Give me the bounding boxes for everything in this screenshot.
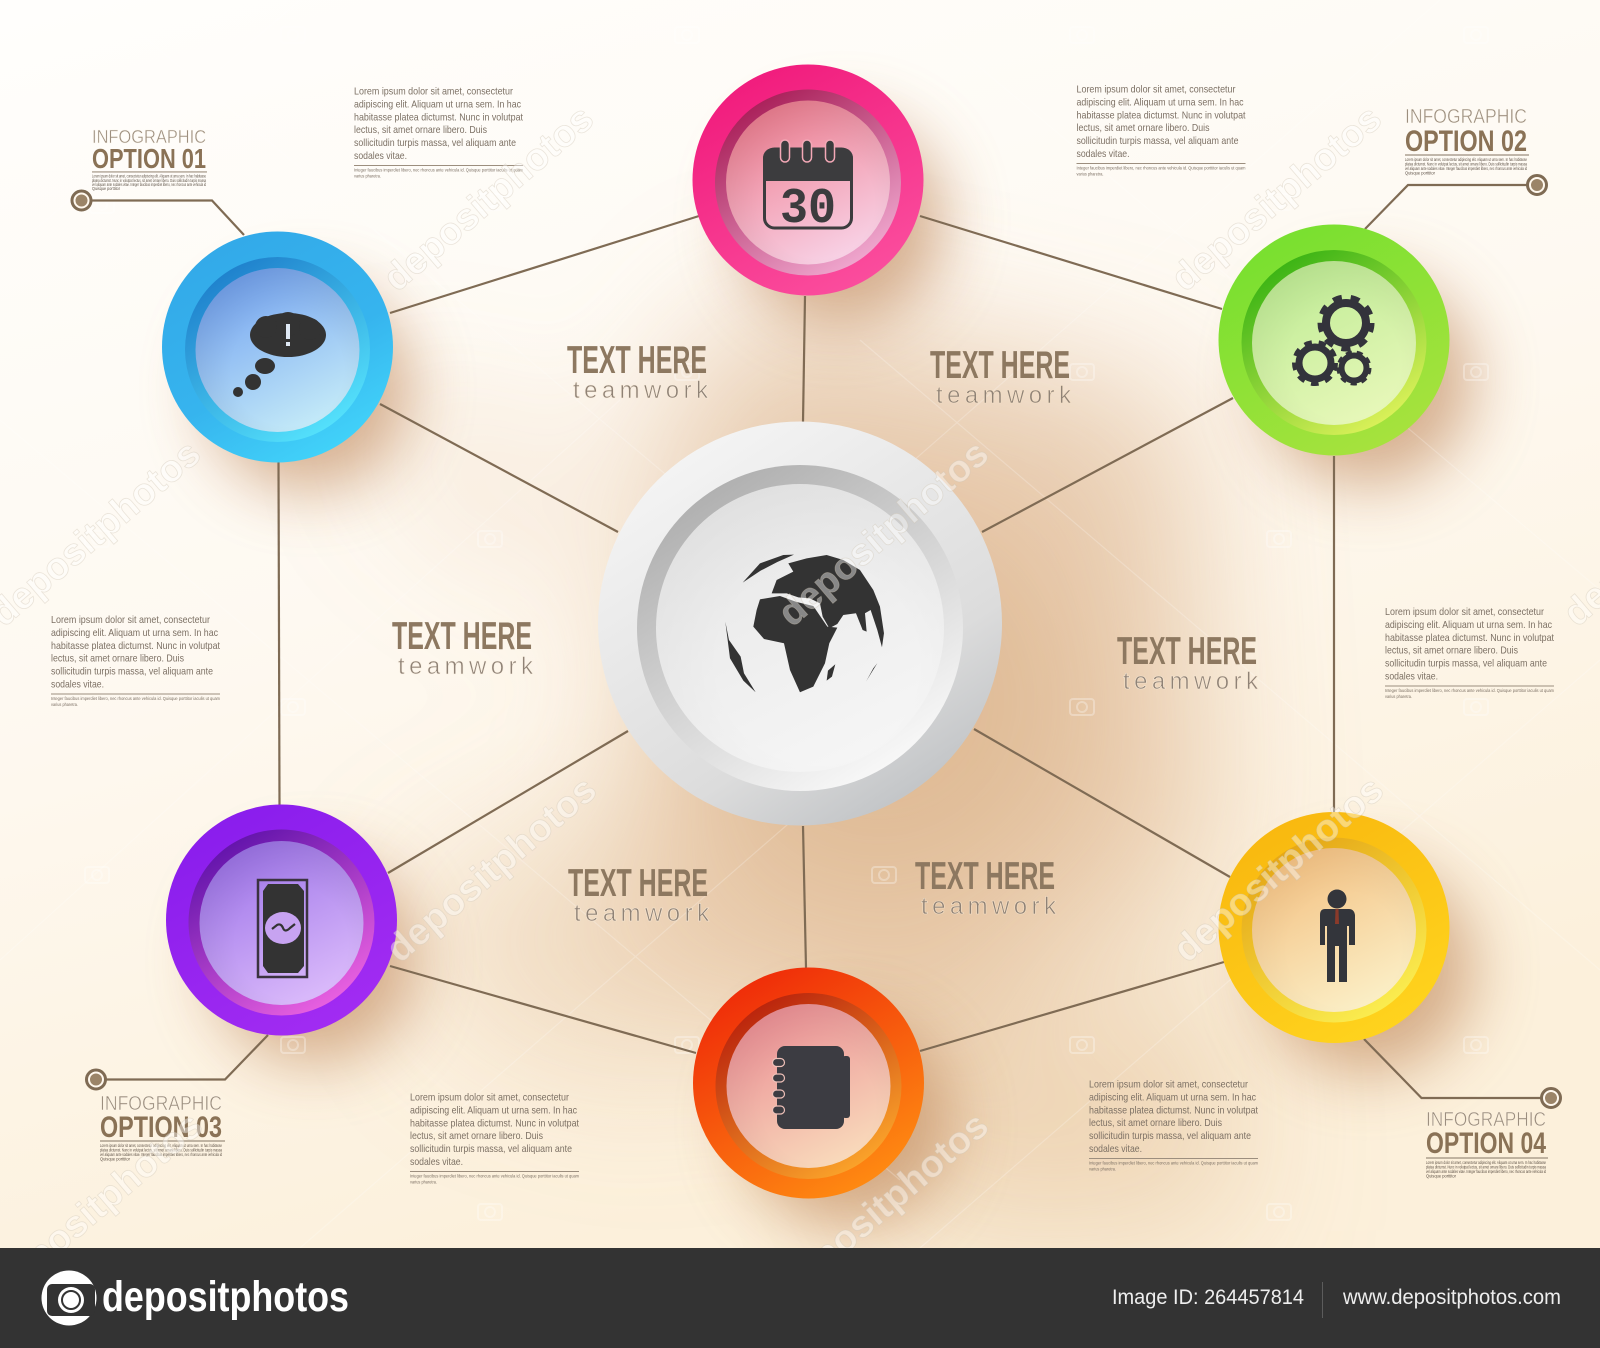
text block: bottom right: habitasse platea dictumst. Nunc in volutpat [1089, 1104, 1258, 1116]
label: text here top right [930, 344, 1072, 409]
text block: middle right: Integer faucibus imperdiet libero, nec rhoncus ante vehicula id. Quisque porttitor iaculis ut quam [1385, 688, 1554, 693]
heading: option 04: INFOGRAPHIC [1426, 1109, 1546, 1131]
text block: middle left: sollicitudin turpis massa, vel aliquam ante [51, 666, 213, 678]
text block: middle right: lectus, sit amet ornare libero. Duis [1385, 645, 1518, 657]
text block: top left: sollicitudin turpis massa, vel aliquam ante [354, 137, 516, 149]
text block: middle left: Integer faucibus imperdiet libero, nec rhoncus ante vehicula id. Quisque porttitor iaculis ut quam [51, 696, 220, 701]
heading: option 02: platea dictumst. Nunc in volutpat lectus, sit amet ornare libero. Duis sollicitudin turpis massa [1405, 162, 1527, 166]
label: text here bottom left: teamwork [574, 900, 710, 927]
watermark text overlay: depositphotos [376, 97, 602, 300]
ring: purple [166, 804, 397, 1036]
heading: option 03: Lorem ipsum dolor sit amet, consectetur adipiscing elit. Aliquam ut urna sem. In hac habitasse [100, 1143, 222, 1148]
heading: option 02: Lorem ipsum dolor sit amet, consectetur adipiscing elit. Aliquam ut urna sem. In hac habitasse [1405, 157, 1527, 162]
text block: top left [354, 86, 523, 178]
heading: option 04 [1426, 1109, 1548, 1178]
text block: bottom left: sodales vitae. [410, 1156, 463, 1168]
text block: middle right: adipiscing elit. Aliquam ut urna sem. In hac [1385, 619, 1552, 631]
text block: top left: habitasse platea dictumst. Nunc in volutpat [354, 111, 523, 123]
text block: top right: sodales vitae. [1076, 148, 1130, 160]
label: text here top right: teamwork [936, 382, 1072, 409]
heading: option 04: OPTION 04 [1426, 1127, 1546, 1160]
text block: bottom left: varius pharetra. [410, 1180, 437, 1184]
text block: middle right: sollicitudin turpis massa, vel aliquam ante [1385, 658, 1547, 670]
site url: www.depositphotos.com [1342, 1285, 1561, 1309]
text block: middle right: habitasse platea dictumst. Nunc in volutpat [1385, 632, 1554, 644]
ring: pink [692, 64, 924, 296]
text block: top right: sollicitudin turpis massa, vel aliquam ante [1076, 135, 1239, 147]
camera watermark icons [85, 27, 1488, 1220]
heading: option 03: INFOGRAPHIC [100, 1093, 222, 1115]
text block: bottom right: Lorem ipsum dolor sit amet, consectetur [1089, 1078, 1248, 1090]
heading: option 01: OPTION 01 [92, 143, 206, 174]
footer bar [0, 1248, 1600, 1348]
callout connector option 01 [72, 191, 244, 235]
text block: top right [1076, 84, 1246, 176]
heading: option 04: Quisque porttitor [1426, 1174, 1456, 1178]
text block: bottom right: Integer faucibus imperdiet libero, nec rhoncus ante vehicula id. Quisque porttitor iaculis ut quam [1089, 1160, 1258, 1166]
heading: option 03: Quisque porttitor [100, 1156, 130, 1162]
text block: middle left: habitasse platea dictumst. Nunc in volutpat [51, 640, 220, 652]
text block: bottom left: sollicitudin turpis massa, vel aliquam ante [410, 1143, 572, 1155]
text block: bottom right: lectus, sit amet ornare libero. Duis [1089, 1117, 1222, 1129]
icon: businessman [1320, 890, 1355, 982]
text block: bottom left [410, 1092, 579, 1184]
heading: option 01: Quisque porttitor [92, 186, 121, 191]
icon: thought bubble [233, 312, 326, 397]
label: text here bottom right: teamwork [921, 893, 1057, 920]
text block: bottom right: adipiscing elit. Aliquam ut urna sem. In hac [1089, 1091, 1256, 1103]
heading: option 02: INFOGRAPHIC [1405, 106, 1527, 128]
label: text here middle left: teamwork [398, 653, 534, 680]
text block: top right: adipiscing elit. Aliquam ut urna sem. In hac [1076, 96, 1244, 108]
text block: bottom right: sodales vitae. [1089, 1143, 1142, 1155]
heading: option 02: vel aliquam ante sodales vitae. Integer faucibus imperdiet libero, nec rhoncus ante vehicula id [1405, 166, 1527, 171]
label: text here middle right: teamwork [1123, 668, 1259, 695]
label: text here top left [567, 339, 709, 404]
heading: option 03 [100, 1093, 225, 1162]
text block: bottom right [1089, 1078, 1258, 1172]
center hub: white ring with globe [598, 422, 1002, 826]
text block: top left: lectus, sit amet ornare libero. Duis [354, 124, 487, 136]
callout connector option 04 [1364, 1039, 1560, 1108]
text block: middle right: Lorem ipsum dolor sit amet, consectetur [1385, 606, 1544, 618]
text block: middle left: Lorem ipsum dolor sit amet, consectetur [51, 614, 210, 626]
text block: top right: habitasse platea dictumst. Nunc in volutpat [1076, 109, 1246, 121]
ring: blue [162, 232, 393, 462]
label: text here middle right [1117, 630, 1259, 695]
label: text here top left: TEXT HERE [567, 339, 707, 382]
label: text here top right: TEXT HERE [930, 344, 1070, 387]
text block: bottom left: Lorem ipsum dolor sit amet, consectetur [410, 1092, 569, 1104]
text block: bottom right: sollicitudin turpis massa, vel aliquam ante [1089, 1130, 1251, 1142]
ring: yellow [1218, 812, 1450, 1043]
label: text here middle right: TEXT HERE [1117, 630, 1257, 673]
text block: middle left [51, 614, 220, 707]
watermark text overlay: depositphotos [1166, 768, 1392, 971]
text block: top right: Lorem ipsum dolor sit amet, consectetur [1076, 84, 1236, 96]
callout connector option 02 [1365, 176, 1546, 229]
icon: calendar: 30 [780, 181, 836, 238]
logo wordmark: depositphotos [102, 1273, 349, 1321]
text block: middle right: varius pharetra. [1385, 694, 1412, 699]
text block: bottom left: lectus, sit amet ornare libero. Duis [410, 1130, 543, 1142]
heading: option 01: Lorem ipsum dolor sit amet, consectetur adipiscing elit. Aliquam ut urna sem. In hac habitasse [92, 174, 207, 179]
heading: option 02: OPTION 02 [1405, 125, 1527, 158]
label: text here bottom right: TEXT HERE [915, 855, 1055, 898]
watermark text overlay: depositphotos [379, 768, 605, 971]
heading: option 01: INFOGRAPHIC [92, 126, 206, 147]
icon: notebook [772, 1046, 850, 1129]
text block: middle left: lectus, sit amet ornare libero. Duis [51, 653, 184, 665]
icon: globe [725, 555, 884, 692]
ring: red [693, 968, 924, 1198]
text block: bottom left: habitasse platea dictumst. Nunc in volutpat [410, 1117, 579, 1129]
label: text here bottom right [915, 855, 1057, 920]
watermark text overlay: depositphotos [1164, 97, 1390, 300]
text block: top right: Integer faucibus imperdiet libero, nec rhoncus ante vehicula id. Quisque porttitor iaculis ut quam [1076, 166, 1246, 170]
text block: middle left: sodales vitae. [51, 678, 104, 690]
label: text here middle left: TEXT HERE [392, 615, 532, 658]
icon: camera logo [42, 1270, 96, 1326]
text block: middle left: adipiscing elit. Aliquam ut urna sem. In hac [51, 627, 218, 639]
ring: green [1218, 224, 1450, 456]
label: text here bottom left [568, 862, 710, 927]
text block: top left: varius pharetra. [354, 174, 381, 178]
heading: option 01: vel aliquam ante sodales vitae. Integer faucibus imperdiet libero, nec rhoncus ante vehicula id [92, 182, 207, 187]
heading: option 01: platea dictumst. Nunc in volutpat lectus, sit amet ornare libero. Duis sollicitudin turpis massa [92, 178, 207, 183]
icon: banknote [258, 880, 307, 977]
text block: top left: sodales vitae. [354, 150, 407, 162]
icon: calendar [763, 140, 853, 238]
text block: top left: adipiscing elit. Aliquam ut urna sem. In hac [354, 98, 521, 110]
text block: top left: Integer faucibus imperdiet libero, nec rhoncus ante vehicula id. Quisque porttitor iaculis ut quam [354, 168, 523, 172]
heading: option 03: platea dictumst. Nunc in volutpat lectus, sit amet ornare libero. Duis sollicitudin turpis massa [100, 1148, 222, 1152]
watermark text overlay: depositphotos [771, 1104, 997, 1307]
text block: bottom left: Integer faucibus imperdiet libero, nec rhoncus ante vehicula id. Quisque porttitor iaculis ut quam [410, 1174, 579, 1178]
label: text here top left: teamwork [573, 377, 709, 404]
soft shadows [206, 118, 1473, 1240]
image id: Image ID: 264457814 [1112, 1285, 1304, 1309]
connector lines network [278, 216, 1334, 1053]
heading: option 02: Quisque porttitor [1405, 170, 1435, 176]
heading: option 01 [92, 126, 207, 191]
icon: gears [1294, 298, 1372, 384]
text block: middle right [1385, 606, 1554, 699]
label: text here bottom left: TEXT HERE [568, 862, 708, 905]
watermark text overlay: depositphotos [771, 432, 997, 635]
text block: bottom right: varius pharetra. [1089, 1166, 1116, 1172]
label: text here middle left [392, 615, 534, 680]
text block: middle left: varius pharetra. [51, 702, 78, 707]
text block: top right: varius pharetra. [1076, 172, 1104, 176]
heading: option 02 [1405, 106, 1529, 176]
text block: top right: lectus, sit amet ornare libero. Duis [1076, 122, 1210, 134]
text block: middle right: sodales vitae. [1385, 670, 1438, 682]
callout connector option 03 [86, 1035, 268, 1089]
heading: option 03: OPTION 03 [100, 1111, 222, 1144]
text block: top left: Lorem ipsum dolor sit amet, consectetur [354, 86, 513, 98]
text block: bottom left: adipiscing elit. Aliquam ut urna sem. In hac [410, 1104, 577, 1116]
heading: option 03: vel aliquam ante sodales vitae. Integer faucibus imperdiet libero, nec rhoncus ante vehicula id [100, 1152, 222, 1157]
